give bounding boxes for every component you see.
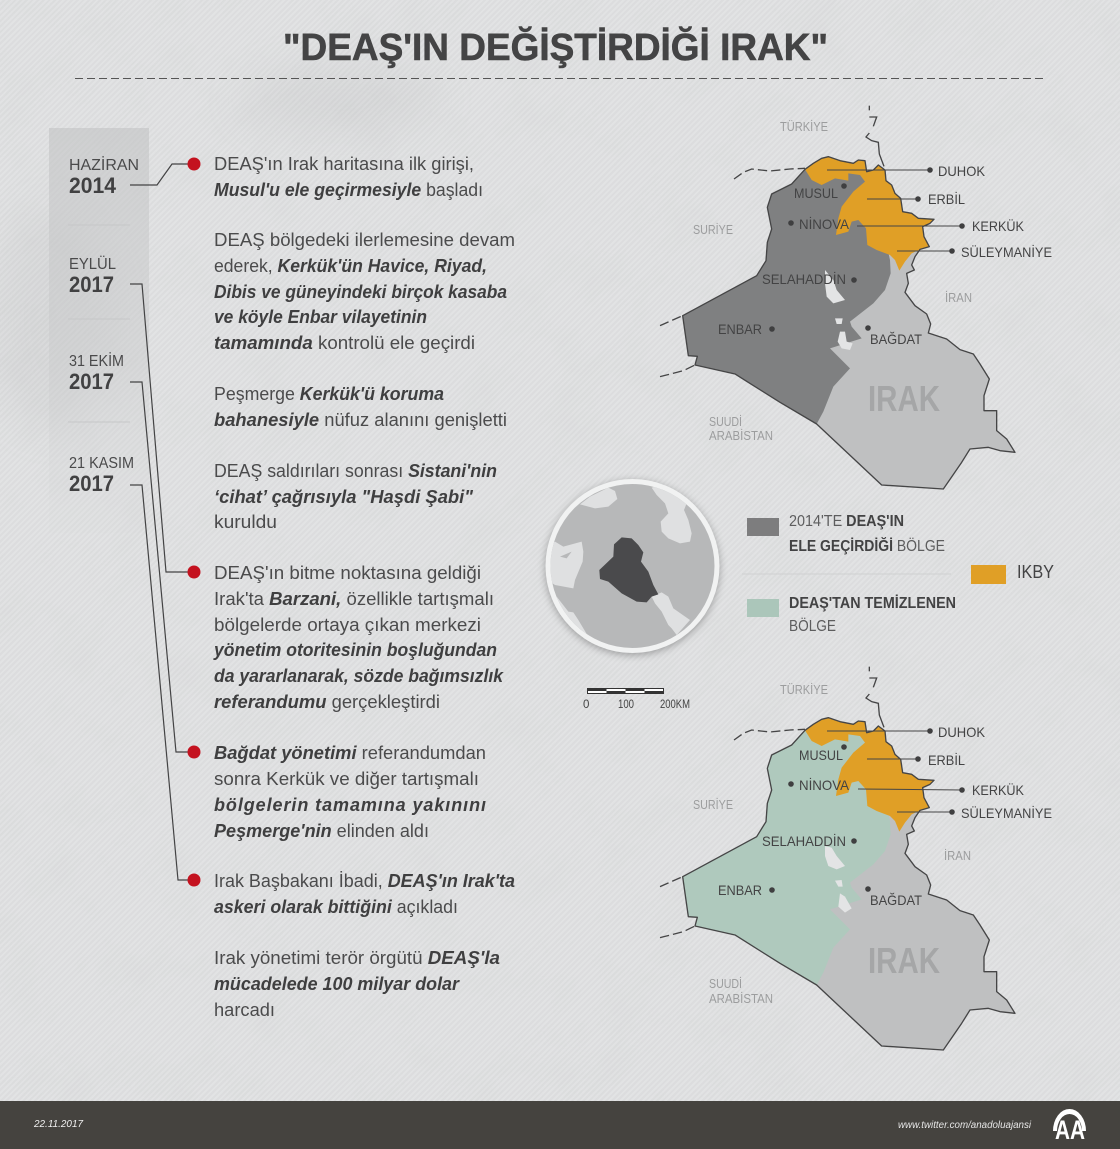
callout lines	[827, 731, 962, 812]
text: second entry: DEAŞ bölgedeki ilerlemesine devam	[214, 230, 515, 250]
legend: IKBY: IKBY	[1017, 562, 1054, 582]
country labels: ARABİSTAN	[709, 991, 773, 1006]
text: first entry: Musul'u ele geçirmesiyle başladı	[214, 180, 483, 200]
city labels: DUHOK	[938, 163, 986, 179]
country labels: TÜRKİYE	[780, 682, 828, 697]
text: seventh entry: Irak Başbakanı İbadi, DEAŞ'ın Irak'ta	[214, 871, 515, 891]
map: 2014 ISIS territory	[660, 106, 1052, 489]
city labels: DUHOK	[938, 724, 986, 740]
country labels	[693, 682, 971, 1006]
footer	[0, 1101, 1120, 1149]
text: second entry: ederek, Kerkük'ün Havice, Riyad,	[214, 256, 487, 276]
city labels: KERKÜK	[972, 217, 1025, 234]
city labels: NİNOVA	[799, 215, 850, 232]
text: eighth entry	[214, 948, 500, 1020]
country labels: SUUDİ	[709, 414, 742, 429]
date: 31 Ekim 2017: 31 EKİM	[69, 351, 124, 370]
legend: territory seized in 2014: ELE GEÇİRDİĞİ BÖLGE	[789, 536, 945, 555]
panel: timeline dates	[49, 128, 149, 533]
date: 21 Kasım 2017: 21 KASIM	[69, 455, 134, 472]
date: 21 Kasım 2017	[69, 455, 134, 496]
text: fifth entry: da yararlanarak, sözde bağımsızlık	[214, 666, 504, 686]
legend: cleared territory: BÖLGE	[789, 617, 836, 635]
text: second entry: ve köyle Enbar vilayetinin	[214, 307, 427, 327]
text block: events	[213, 154, 515, 1020]
city labels: SÜLEYMANİYE	[961, 243, 1052, 260]
legend: cleared territory	[747, 594, 956, 635]
legend	[742, 513, 1054, 635]
legend: cleared territory: DEAŞ'TAN TEMİZLENEN	[789, 594, 956, 612]
date: Eylül 2017	[69, 255, 116, 297]
text: third entry	[214, 384, 507, 430]
country labels: SURİYE	[693, 222, 733, 237]
date: 21 Kasım 2017: 2017	[69, 471, 114, 496]
map: territory cleared of ISIS	[660, 667, 1052, 1050]
text: eighth entry: Irak yönetimi terör örgütü DEAŞ'la	[214, 948, 500, 968]
city labels: ERBİL	[928, 190, 965, 207]
timeline connectors	[130, 164, 190, 880]
map shapes	[660, 106, 1015, 489]
country labels	[693, 119, 972, 443]
text: seventh entry: askeri olarak bittiğini açıkladı	[214, 897, 458, 917]
text: sixth entry	[214, 743, 486, 841]
text: third entry: bahanesiyle nüfuz alanını genişletti	[214, 410, 507, 430]
city labels: BAĞDAT	[870, 331, 922, 347]
date: 31 Ekim 2017: 2017	[69, 369, 114, 394]
text: second entry: tamamında kontrolü ele geçirdi	[214, 333, 475, 353]
city labels: ERBİL	[928, 751, 965, 768]
country name: Irak: IRAK	[868, 940, 940, 981]
city labels: KERKÜK	[972, 781, 1025, 798]
date: Haziran 2014	[69, 155, 139, 198]
legend: territory seized in 2014	[747, 513, 945, 555]
text: second entry	[214, 230, 515, 353]
text: fifth entry: Irak'ta Barzani, özellikle tartışmalı	[214, 589, 494, 609]
text: sixth entry: Bağdat yönetimi referandumdan	[214, 743, 486, 763]
country labels: İRAN	[944, 848, 971, 863]
text: sixth entry: sonra Kerkük ve diğer tartışmalı	[214, 769, 479, 789]
scale bar: 100	[618, 699, 634, 711]
country labels: SUUDİ	[709, 976, 742, 991]
text: fifth entry: yönetim otoritesinin boşluğundan	[213, 640, 497, 660]
scale bar	[583, 688, 690, 711]
date: Eylül 2017: EYLÜL	[69, 255, 116, 273]
date: Eylül 2017: 2017	[69, 272, 114, 297]
footer url: www.twitter.com/anadoluajansi	[898, 1120, 1032, 1131]
city labels: MUSUL	[794, 185, 838, 201]
city labels	[718, 163, 1052, 347]
text: fifth entry	[213, 563, 504, 712]
map shapes	[660, 667, 1015, 1050]
date: Haziran 2014: HAZİRAN	[69, 155, 139, 174]
city labels: BAĞDAT	[870, 892, 922, 908]
country labels: İRAN	[945, 290, 972, 305]
text: third entry: Peşmerge Kerkük'ü koruma	[214, 384, 444, 404]
city labels: SÜLEYMANİYE	[961, 804, 1052, 821]
scale bar: 0	[583, 699, 589, 711]
text: fourth entry	[214, 461, 497, 532]
city labels: SELAHADDİN	[762, 832, 846, 849]
text: sixth entry: Peşmerge'nin elinden aldı	[214, 821, 429, 841]
callout lines	[827, 170, 962, 251]
city labels: NİNOVA	[799, 776, 850, 793]
title: "DEAŞ'IN DEĞİŞTİRDİĞİ IRAK"	[283, 25, 828, 69]
country name: Irak: IRAK	[868, 378, 940, 419]
legend: territory seized in 2014: 2014'TE DEAŞ'IN	[789, 513, 904, 530]
footer date: 22.11.2017	[33, 1119, 83, 1130]
city labels: MUSUL	[799, 747, 843, 763]
city dots	[769, 728, 965, 893]
scale bar: 200KM	[660, 699, 690, 711]
city labels: SELAHADDİN	[762, 270, 846, 287]
city labels: ENBAR	[718, 882, 762, 898]
legend: IKBY	[971, 562, 1054, 584]
city labels: ENBAR	[718, 321, 762, 337]
country labels: ARABİSTAN	[709, 428, 773, 443]
timeline markers	[188, 158, 200, 886]
text: eighth entry: mücadelede 100 milyar dolar	[214, 974, 460, 994]
date: 31 Ekim 2017	[69, 351, 124, 394]
text: fourth entry: DEAŞ saldırıları sonrası Sistani'nin	[214, 461, 497, 481]
text: sixth entry: bölgelerin tamamına yakınını	[214, 795, 486, 815]
text: fifth entry: referandumu gerçekleştirdi	[214, 692, 440, 712]
icon: agency logo: AA	[1055, 1115, 1085, 1145]
text: first entry	[214, 154, 483, 200]
icon: agency logo	[1053, 1109, 1086, 1145]
text: fifth entry: bölgelerde ortaya çıkan merkezi	[214, 615, 481, 635]
locator globe	[540, 479, 720, 653]
text: seventh entry	[214, 871, 515, 917]
text: fourth entry: ‘cihat’ çağrısıyla "Haşdi Şabi"	[214, 487, 473, 507]
city labels	[718, 724, 1052, 908]
text: fourth entry: kuruldu	[214, 512, 277, 532]
date: Haziran 2014: 2014	[69, 173, 117, 198]
text: fifth entry: DEAŞ'ın bitme noktasına geldiği	[214, 563, 481, 583]
text: first entry: DEAŞ'ın Irak haritasına ilk girişi,	[214, 154, 474, 174]
text: eighth entry: harcadı	[214, 1000, 275, 1020]
country labels: TÜRKİYE	[780, 119, 828, 134]
text: second entry: Dibis ve güneyindeki birçok kasaba	[214, 282, 507, 302]
country labels: SURİYE	[693, 797, 733, 812]
city dots	[769, 167, 965, 332]
